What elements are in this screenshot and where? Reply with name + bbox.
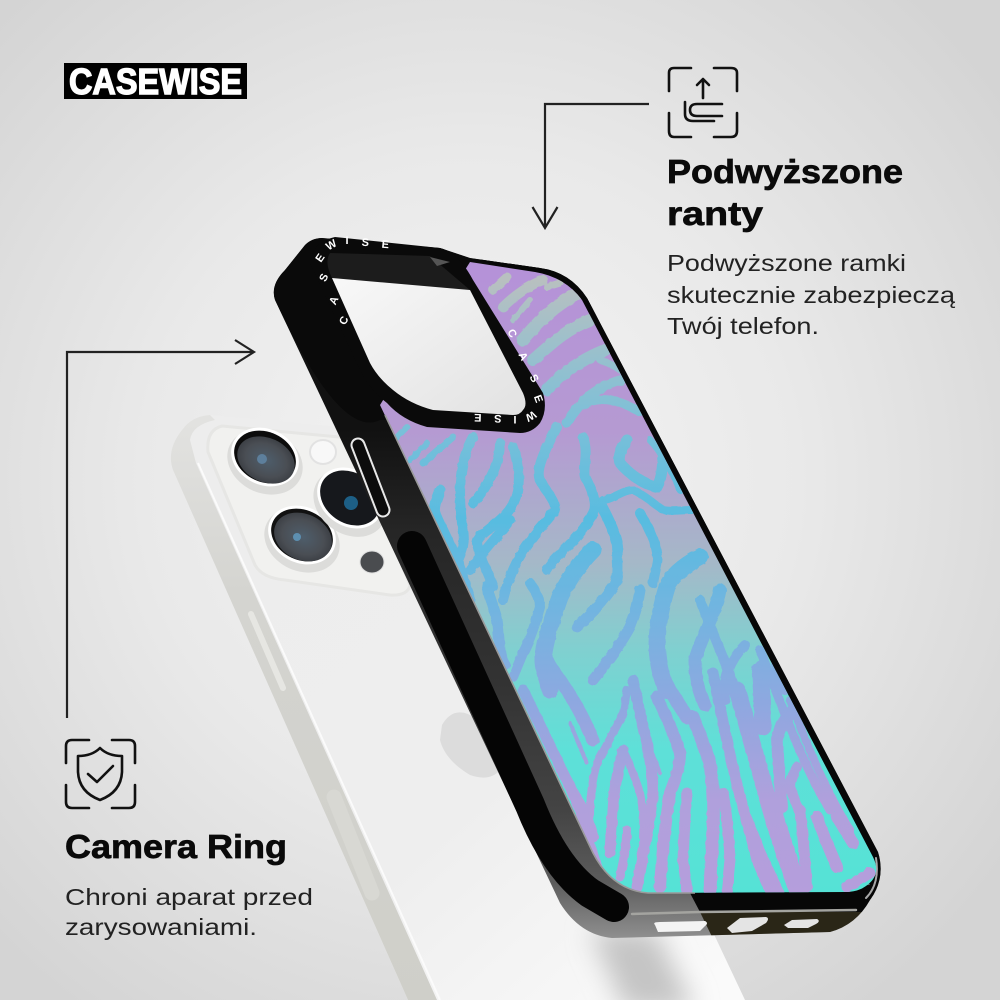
text: raised edges description	[667, 250, 955, 339]
ring lettering: I	[345, 235, 349, 247]
lens: bottom	[254, 495, 350, 585]
ring lettering: E	[381, 239, 389, 251]
heading: raised edges: ranty	[667, 195, 764, 232]
rim highlights	[632, 858, 877, 914]
ring lettering: S	[527, 373, 541, 385]
ring body	[310, 237, 545, 433]
side button: lower	[334, 797, 372, 893]
camera ring	[310, 235, 545, 433]
shadow on phone back	[590, 930, 695, 1000]
text: raised edges description: Podwyższone ramki	[667, 250, 906, 276]
ring lettering	[314, 235, 545, 425]
flash	[310, 440, 336, 464]
ring lettering: S	[494, 412, 502, 424]
heading: raised edges	[667, 153, 903, 232]
side slot	[412, 546, 614, 907]
text: camera ring description: Chroni aparat przed	[65, 884, 313, 910]
text: raised edges description: Twój telefon.	[667, 313, 819, 339]
ports	[654, 917, 819, 933]
apple logo	[440, 712, 505, 778]
white phone	[171, 415, 745, 1000]
camera plateau	[208, 426, 410, 595]
logo: CASEWISE	[69, 61, 242, 102]
right rim and see-through boundary	[470, 255, 900, 945]
side button fill	[358, 445, 383, 510]
black case	[274, 238, 900, 945]
case body	[274, 238, 881, 938]
zebra stripes	[397, 277, 870, 893]
ring lettering: I	[513, 413, 517, 425]
bottom port wall	[700, 912, 862, 936]
ring lettering: E	[474, 411, 482, 423]
text: camera ring description	[65, 884, 313, 940]
heading: raised edges: Podwyższone	[667, 153, 903, 190]
text: raised edges description: skutecznie zabezpieczą	[667, 282, 955, 308]
ring lettering: C	[504, 327, 519, 340]
pattern edge highlight	[385, 415, 695, 893]
lens: top left	[217, 417, 313, 507]
lens: right	[300, 455, 400, 551]
sensor	[360, 551, 384, 573]
right rim	[470, 255, 900, 900]
ring lettering: S	[361, 237, 369, 249]
phone side edge	[171, 415, 437, 1000]
edge highlight	[198, 463, 440, 1000]
inner wall highlight	[327, 253, 470, 290]
black upper band	[274, 238, 598, 326]
zebra pattern panel	[370, 255, 900, 900]
heading: camera ring: Camera Ring	[65, 828, 287, 865]
camera window	[332, 278, 526, 415]
text: camera ring description: zarysowaniami.	[65, 914, 257, 940]
ring lettering: W	[324, 237, 340, 253]
arrow: raised edges	[532, 104, 649, 228]
icon: raised edges	[669, 68, 737, 137]
ring lettering: S	[317, 272, 331, 284]
ring lettering: A	[515, 350, 530, 363]
bottom black band	[690, 886, 878, 912]
side button: upper	[251, 614, 283, 688]
ring lettering: W	[522, 408, 538, 424]
ring lettering: E	[314, 252, 328, 265]
ring lettering: E	[531, 393, 545, 404]
icon: shield with check	[66, 740, 135, 808]
arrow: camera ring	[67, 340, 254, 718]
side button outline	[358, 445, 383, 510]
ring lettering: C	[337, 315, 351, 327]
ring lettering: A	[327, 295, 341, 307]
